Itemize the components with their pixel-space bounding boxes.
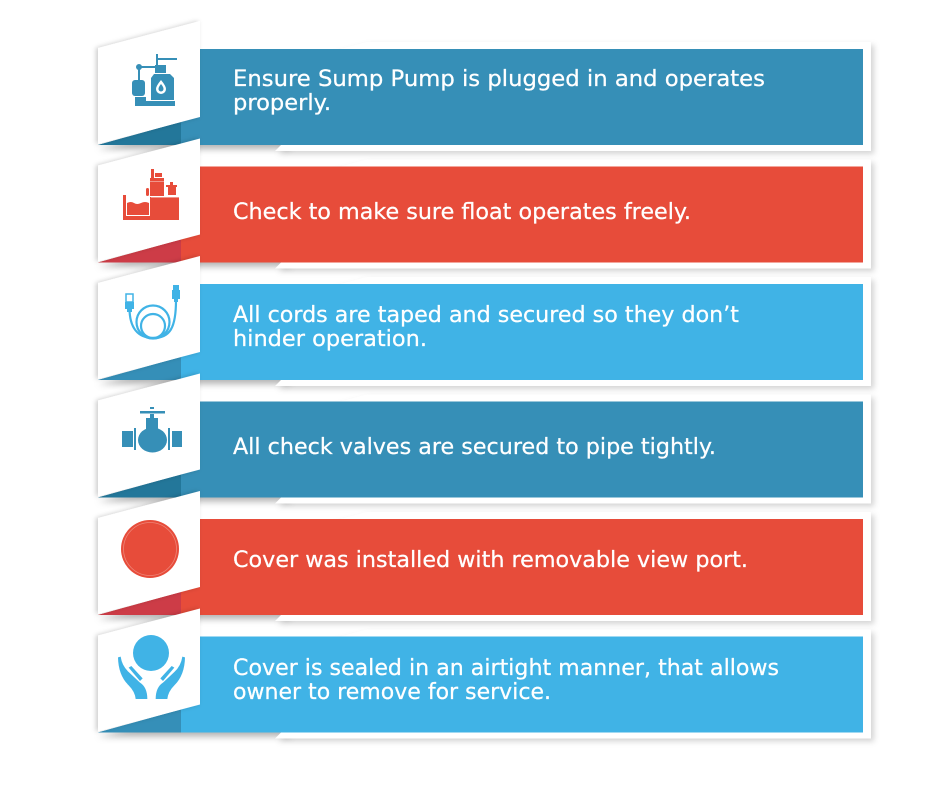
icon: float and basin	[123, 169, 179, 220]
text: step 3: hinder operation.	[233, 326, 427, 352]
icon: round cover	[121, 520, 179, 578]
panel: step 1 sump pump	[98, 21, 871, 151]
text: step 6	[233, 655, 779, 705]
icon: cords	[125, 285, 180, 338]
icon: sump pump	[132, 54, 177, 106]
text: step 1	[233, 66, 765, 116]
text: step 1: Ensure Sump Pump is plugged in and operates	[233, 66, 765, 92]
text: step 2: Check to make sure float operates freely.	[233, 199, 691, 225]
panel: step 6 sealed cover	[98, 608, 871, 738]
text: step 6: Cover is sealed in an airtight manner, that allows	[233, 655, 779, 681]
text: step 3: All cords are taped and secured so they don’t	[233, 302, 739, 328]
panel: step 5 cover view port	[98, 491, 871, 621]
text: step 4: All check valves are secured to pipe tightly.	[233, 434, 716, 460]
icon: valve	[122, 407, 182, 452]
text: step 3	[233, 302, 739, 352]
panel: step 2 float	[98, 138, 871, 268]
text: step 5: Cover was installed with removable view port.	[233, 547, 748, 573]
text: step 6: owner to remove for service.	[233, 679, 551, 705]
panel: step 3 cords	[98, 256, 871, 386]
panel: step 4 check valves	[98, 374, 871, 504]
text: step 1: properly.	[233, 90, 331, 116]
icon: hands holding cover	[118, 635, 185, 699]
